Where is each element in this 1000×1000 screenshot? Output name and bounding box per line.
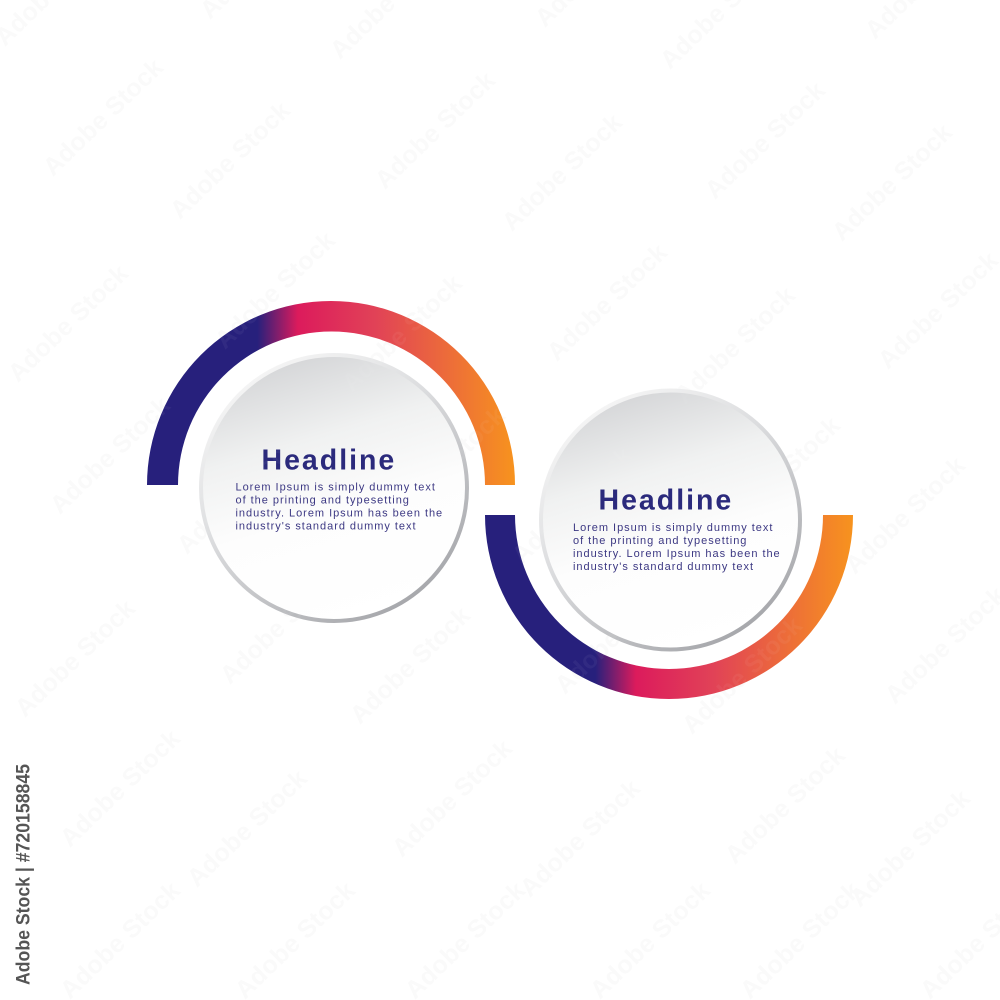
text block: left: industry's standard dummy text — [236, 520, 416, 532]
text block: left: Lorem Ipsum is simply dummy text — [236, 482, 436, 494]
text block: left: industry. Lorem Ipsum has been the — [236, 508, 443, 520]
text block: left — [236, 482, 443, 532]
text block: right — [573, 522, 781, 573]
panel: left circle — [201, 355, 467, 621]
text block: right: industry. Lorem Ipsum has been the — [573, 548, 781, 560]
text block: right: Lorem Ipsum is simply dummy text — [573, 522, 773, 534]
text block: right: industry's standard dummy text — [573, 561, 754, 573]
panel: right circle — [541, 390, 800, 650]
heading: left: Headline — [262, 444, 396, 476]
arc: top gradient semicircle — [147, 301, 515, 485]
stock credit: Adobe Stock | #720158845 — [14, 764, 34, 985]
heading: right: Headline — [598, 484, 733, 516]
arc: bottom gradient semicircle — [485, 515, 853, 699]
text block: left: of the printing and typesetting — [236, 494, 410, 506]
text block: right: of the printing and typesetting — [573, 535, 747, 547]
